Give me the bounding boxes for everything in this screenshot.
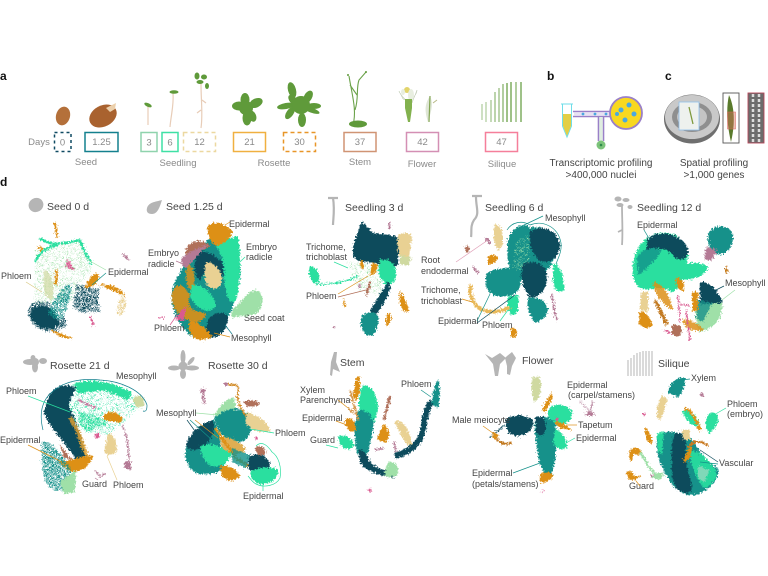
panel: Rosette 30 d <box>156 350 306 501</box>
day box 21 <box>234 132 266 152</box>
UMAP clusters <box>309 221 412 336</box>
day box 47 <box>486 132 518 152</box>
label Embryo radicle left: Embryo <box>148 248 179 258</box>
day box 37 <box>344 132 376 152</box>
title: Seedling 12 d <box>637 202 701 214</box>
day box 6 <box>162 132 178 152</box>
label Xylem Parenchyma: Xylem <box>300 385 325 395</box>
icon: seed silhouette <box>26 195 46 215</box>
icon: seedling 12 d <box>194 72 209 128</box>
panel: Seedling 3 d <box>306 198 412 336</box>
caption b: Transcriptomic profiling <box>550 158 652 169</box>
title: Seedling 6 d <box>485 202 544 214</box>
label Root endodermal <box>421 255 469 276</box>
label Seed coat: Seed coat <box>244 313 285 323</box>
outline: mesophyll <box>507 222 561 264</box>
panel c: spatial profiling <box>664 69 764 181</box>
leaders <box>28 396 117 480</box>
day box 0 <box>54 132 71 152</box>
label Epidermal: Epidermal <box>108 267 149 277</box>
label Mesophyll: Mesophyll <box>725 278 766 288</box>
icon: imbibed seed silhouette <box>147 200 162 214</box>
label Xylem Parenchyma <box>300 385 351 405</box>
icon: seedling silhouette <box>471 196 482 237</box>
icon: rosette silhouette <box>168 350 199 379</box>
label Root endodermal: endodermal <box>421 266 469 276</box>
icon: seedling silhouette <box>614 196 632 245</box>
title: Seed 0 d <box>47 201 89 213</box>
label Tapetum: Tapetum <box>578 420 613 430</box>
icon: rosette 21 d <box>232 93 264 126</box>
label Mesophyll: Mesophyll <box>545 213 586 223</box>
stage labels: Flower <box>408 159 436 170</box>
label Guard: Guard <box>310 435 335 445</box>
label Trichome, trichoblast: trichoblast <box>421 296 463 306</box>
day box 6: 6 <box>167 138 173 148</box>
panel letter b: b <box>547 69 554 83</box>
icon: dry seed <box>54 105 72 127</box>
Days label: Days <box>28 137 50 148</box>
icon: seedling 6 d <box>170 90 178 127</box>
UMAP clusters <box>633 226 733 340</box>
leaders <box>644 230 735 300</box>
leaders <box>187 413 274 491</box>
label Guard: Guard <box>82 479 107 489</box>
label Mesophyll: Mesophyll <box>156 408 197 418</box>
panel: Silique <box>627 351 763 495</box>
label Embryo radicle right <box>246 242 277 262</box>
label Phloem: Phloem <box>1 271 32 281</box>
label Xylem: Xylem <box>691 373 716 383</box>
label Trichome, trichoblast: trichoblast <box>306 252 348 262</box>
label Epidermal (petals/stamens): (petals/stamens) <box>472 479 539 489</box>
day box 1.25: 1.25 <box>92 137 111 148</box>
panel: Seed 0 d <box>1 195 149 338</box>
label Trichome, trichoblast: Trichome, <box>421 285 461 295</box>
label Mesophyll: Mesophyll <box>231 333 272 343</box>
title: Flower <box>522 355 554 367</box>
caption c: >1,000 genes <box>684 170 744 181</box>
UMAP clusters <box>627 378 718 495</box>
day box 47: 47 <box>496 137 507 148</box>
label Epidermal: Epidermal <box>0 435 41 445</box>
label Epidermal (carpel/stamens): (carpel/stamens) <box>568 390 635 400</box>
outline: epidermal <box>248 444 281 486</box>
icon: stem silhouette <box>330 352 340 376</box>
label Epidermal: Epidermal <box>229 219 270 229</box>
UMAP clusters <box>467 224 564 338</box>
label Trichome, trichoblast: Trichome, <box>306 242 346 252</box>
leaders <box>456 216 543 323</box>
panel: Seed 1.25 d <box>147 200 285 343</box>
icon: zoomed tissue <box>748 93 764 143</box>
icon: imbibed seed <box>85 100 121 132</box>
leaders <box>326 390 431 448</box>
label Epidermal (petals/stamens) <box>472 468 539 489</box>
panel: Stem <box>300 352 440 492</box>
label Phloem (embryo): (embryo) <box>727 409 763 419</box>
label Phloem: Phloem <box>482 320 513 330</box>
label Root endodermal: Root <box>421 255 441 265</box>
icon: silique section <box>723 93 739 143</box>
label Guard: Guard <box>629 481 654 491</box>
day box 1.25 <box>85 132 118 152</box>
title: Rosette 21 d <box>50 360 110 372</box>
leaders <box>26 260 106 292</box>
title: Rosette 30 d <box>208 360 268 372</box>
label Mesophyll: Mesophyll <box>116 371 157 381</box>
icon: rosette 30 d <box>277 81 321 127</box>
label Embryo radicle left <box>148 248 179 269</box>
icon: silique silhouettes <box>628 351 652 376</box>
caption c <box>680 158 748 181</box>
day box 21: 21 <box>244 137 255 148</box>
icon: stem plant <box>347 71 367 128</box>
label Trichome, trichoblast <box>421 285 463 306</box>
label Epidermal (petals/stamens): Epidermal <box>472 468 513 478</box>
day box 30 <box>284 132 316 152</box>
icon: seedling 3 d <box>144 102 152 125</box>
title: Seed 1.25 d <box>166 201 223 213</box>
UMAP clusters <box>185 382 278 484</box>
panel: Flower <box>452 352 635 492</box>
stage labels: Seed <box>75 157 97 168</box>
label Epidermal: Epidermal <box>438 316 479 326</box>
label Phloem: Phloem <box>306 291 337 301</box>
stage labels <box>75 157 516 170</box>
day box 37: 37 <box>355 137 365 148</box>
leaders <box>636 379 726 486</box>
day box 42 <box>406 132 438 152</box>
stage labels: Silique <box>488 159 516 170</box>
panel: Seedling 12 d <box>614 196 766 340</box>
stage labels: Seedling <box>160 158 196 169</box>
stage labels: Stem <box>349 157 371 168</box>
UMAP clusters <box>41 381 144 494</box>
panel letter c: c <box>665 69 672 83</box>
label Trichome, trichoblast <box>306 242 348 262</box>
day box 12 <box>184 132 216 152</box>
label Epidermal: Epidermal <box>302 413 343 423</box>
label Vascular: Vascular <box>719 458 753 468</box>
day box 3: 3 <box>146 138 152 148</box>
label Phloem: Phloem <box>6 386 37 396</box>
label Epidermal (carpel/stamens): Epidermal <box>567 380 608 390</box>
panel: Rosette 21 d <box>0 355 157 494</box>
panel letter a: a <box>0 69 7 83</box>
icon: microfluidic droplet device <box>561 97 642 150</box>
panel letter d: d <box>0 175 7 189</box>
day box 12: 12 <box>194 137 205 148</box>
icon: flower silhouettes <box>485 352 516 376</box>
label Phloem: Phloem <box>401 379 432 389</box>
icon: rosette silhouette <box>23 355 47 372</box>
label Male meiocyte: Male meiocyte <box>452 415 510 425</box>
leaders <box>170 222 250 337</box>
leaders <box>334 262 368 297</box>
UMAP clusters <box>490 376 595 492</box>
label Epidermal: Epidermal <box>637 220 678 230</box>
UMAP clusters <box>28 223 129 338</box>
label Phloem: Phloem <box>275 428 306 438</box>
leaders <box>483 400 592 473</box>
title: Seedling 3 d <box>345 202 404 214</box>
stage labels: Rosette <box>258 158 290 169</box>
label Embryo radicle right: radicle <box>246 252 273 262</box>
title: Stem <box>340 357 365 369</box>
caption b <box>550 158 652 181</box>
UMAP clusters <box>158 223 262 340</box>
day box 30: 30 <box>294 137 305 148</box>
panel b: transcriptomic profiling <box>547 69 652 181</box>
day box 3 <box>141 132 157 152</box>
label Phloem (embryo) <box>727 399 763 419</box>
icon: slide holder <box>664 94 720 144</box>
icon: siliques <box>482 82 521 122</box>
label Xylem Parenchyma: Parenchyma <box>300 395 351 405</box>
label Epidermal: Epidermal <box>243 491 284 501</box>
label Epidermal: Epidermal <box>576 433 617 443</box>
caption b: >400,000 nuclei <box>566 170 636 181</box>
icon: flowers <box>399 87 437 122</box>
title: Silique <box>658 358 690 370</box>
label Epidermal (carpel/stamens) <box>567 380 635 400</box>
label Embryo radicle right: Embryo <box>246 242 277 252</box>
UMAP clusters <box>338 376 440 492</box>
label Embryo radicle left: radicle <box>148 259 175 269</box>
icon: seedling silhouette <box>328 198 338 225</box>
outline: mesophyll <box>41 379 147 430</box>
day box 42: 42 <box>417 137 428 148</box>
panel a: developmental stages <box>0 69 521 170</box>
caption c: Spatial profiling <box>680 158 748 169</box>
panel: Seedling 6 d <box>421 196 586 338</box>
label Phloem: Phloem <box>113 480 144 490</box>
label Phloem: Phloem <box>154 323 185 333</box>
label Phloem (embryo): Phloem <box>727 399 758 409</box>
day box 0: 0 <box>60 138 65 148</box>
